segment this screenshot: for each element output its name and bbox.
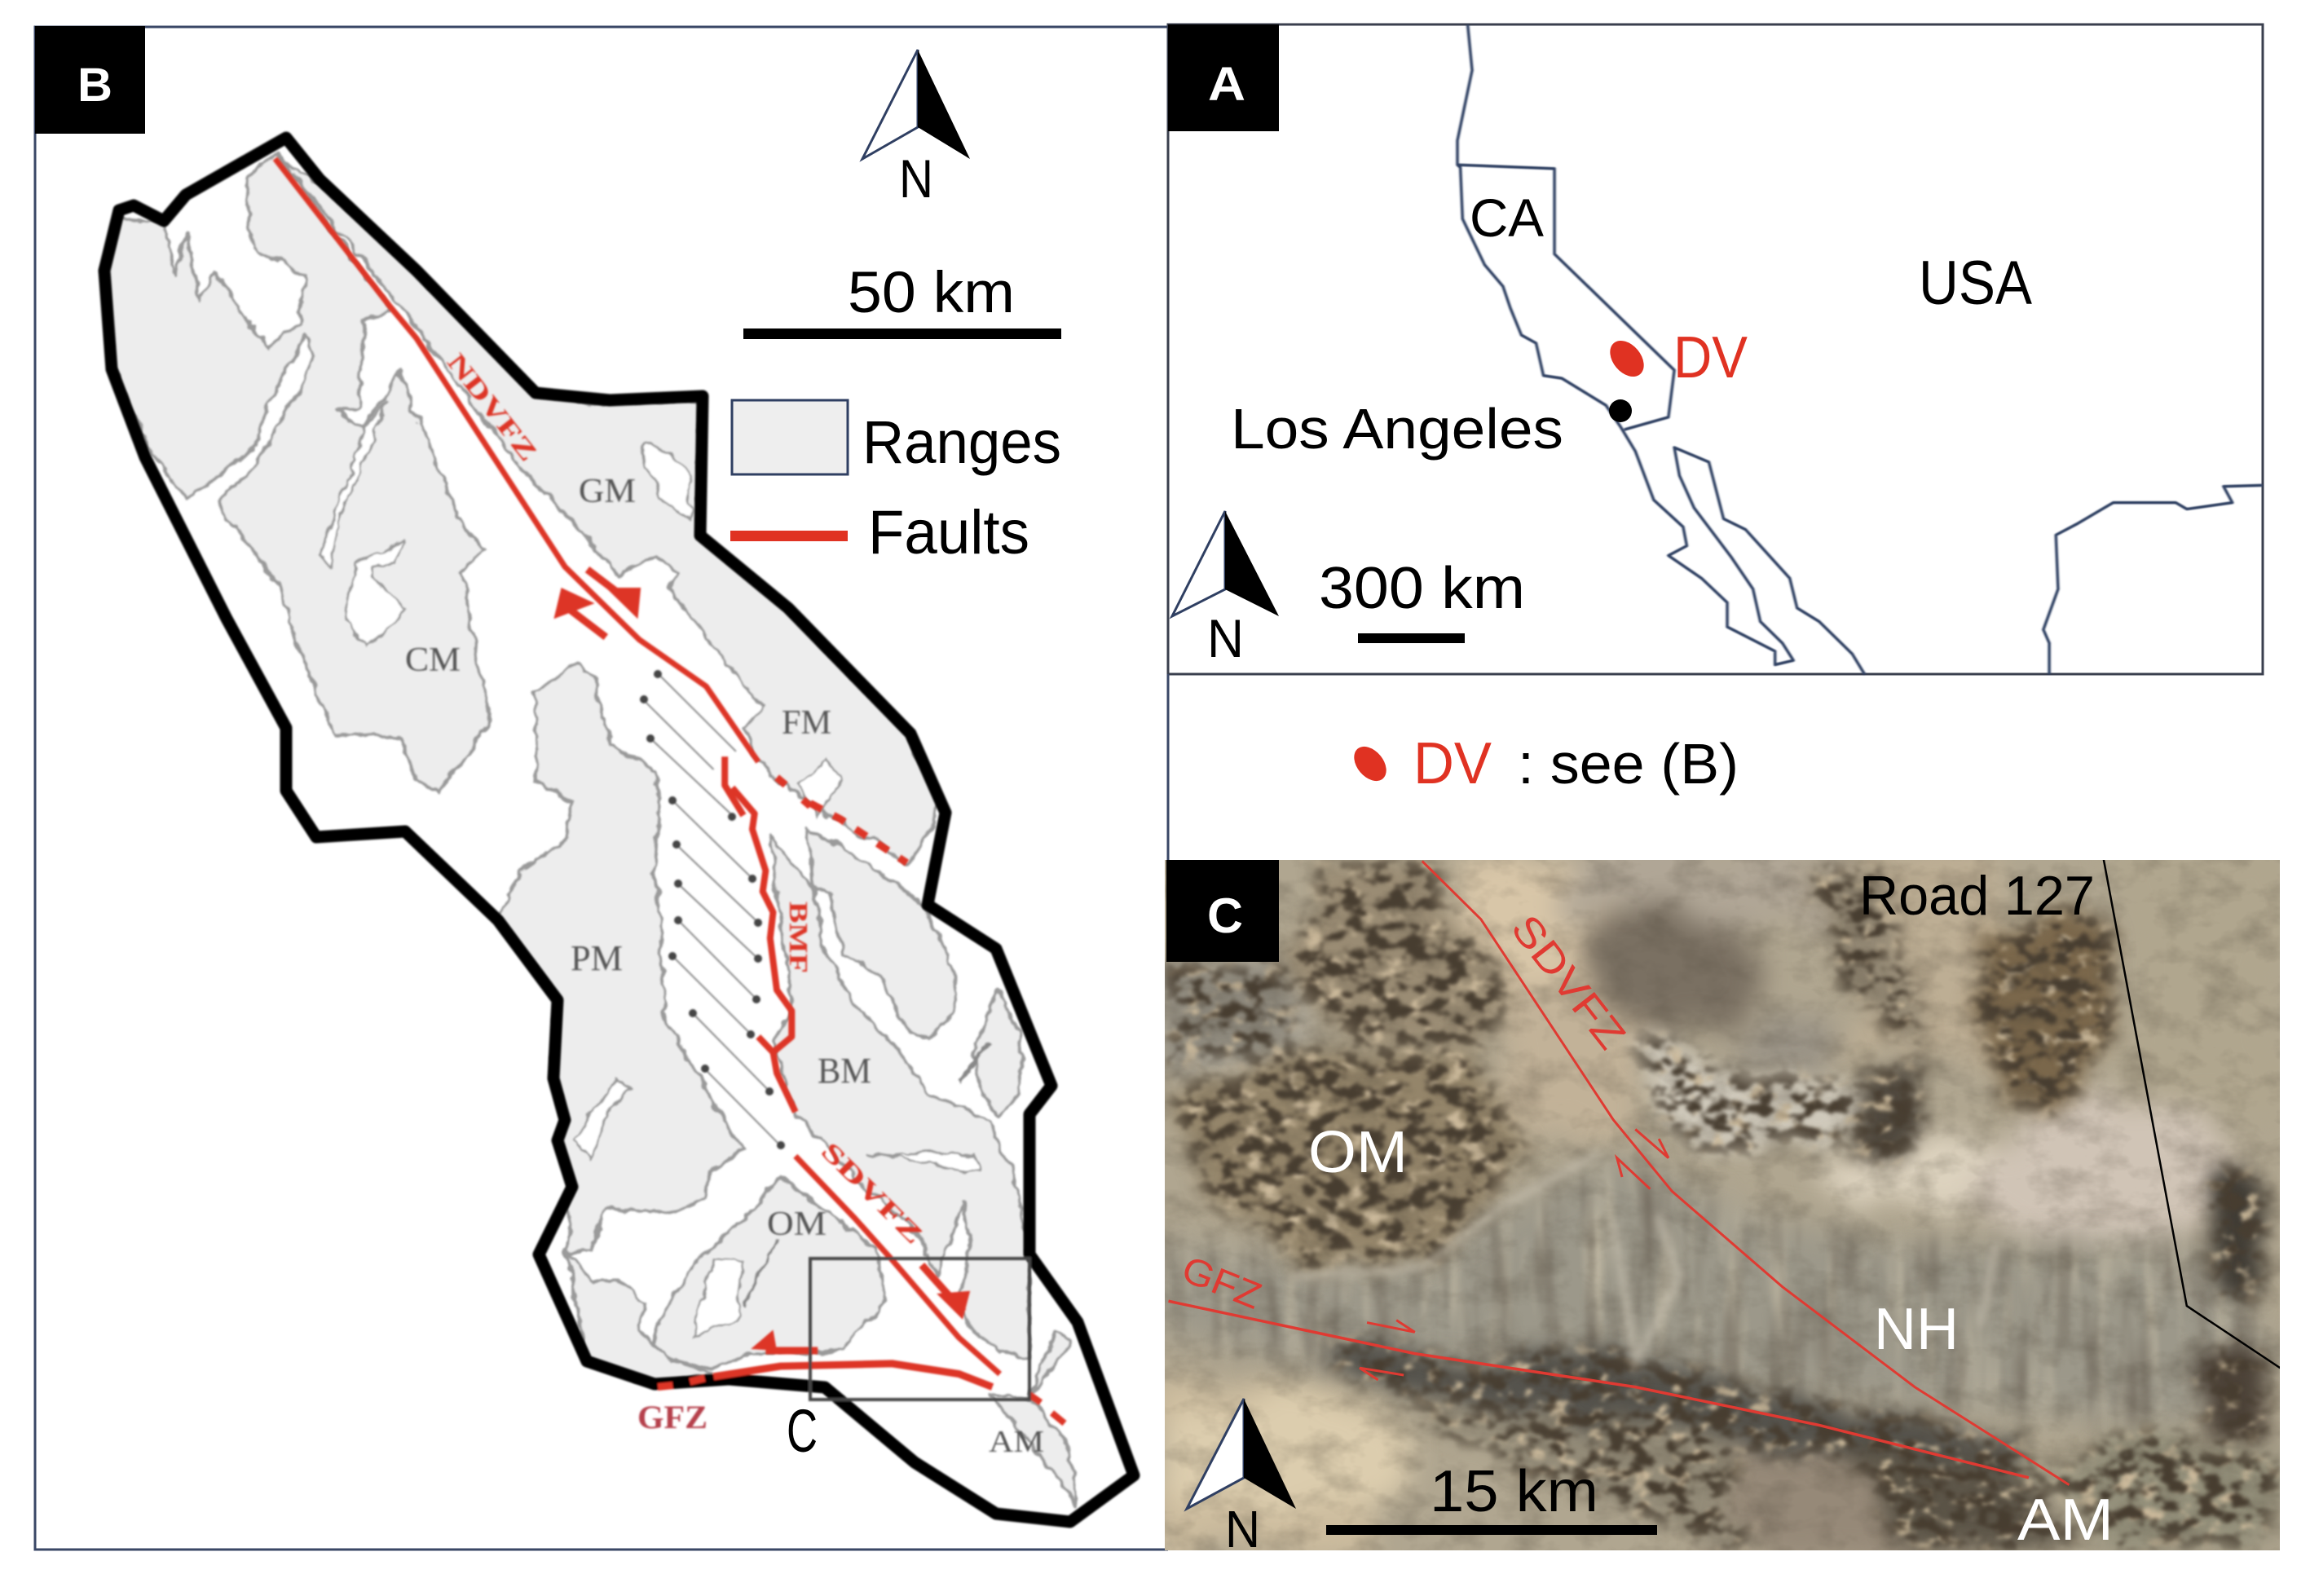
label SDVFZ: SDVFZ [1502, 906, 1634, 1058]
badge C: C [1207, 888, 1243, 943]
scale bar 300 km [1319, 556, 1525, 643]
satellite grain overlay [1165, 860, 2280, 1550]
inset box C [810, 1259, 1029, 1400]
range and fault labels: PM [571, 938, 623, 978]
panel A: location map [1168, 24, 2263, 674]
marker: DV [1603, 325, 1748, 390]
range and fault labels: FM [782, 704, 831, 742]
marker: Los Angeles: Los Angeles [1231, 397, 1563, 461]
badge A: A [1208, 58, 1245, 111]
coastline and borders [1457, 24, 2263, 674]
label C for inset: C [787, 1397, 818, 1465]
north arrow A [1172, 511, 1279, 668]
label USA: USA [1919, 249, 2032, 318]
satellite broad terrain [1157, 848, 2297, 1554]
label OM: OM [1308, 1120, 1408, 1185]
range and fault labels: SDVFZ [816, 1136, 929, 1250]
legend: ranges and faults [730, 400, 1061, 567]
label AM: AM [2017, 1488, 2114, 1553]
map linework and labels [104, 138, 1134, 1522]
range and fault labels: BM [818, 1051, 871, 1091]
range and fault labels [405, 347, 1044, 1459]
range and fault labels: GM [579, 473, 636, 510]
scale bar 50 km: 50 km [848, 261, 1015, 325]
basin hatch dots [640, 670, 785, 1149]
panel B: Death Valley regional map [35, 26, 1168, 1550]
badge C [1166, 858, 1279, 962]
scale bar 15 km [1326, 1459, 1657, 1535]
range and fault labels: CM [405, 641, 461, 679]
legend: ranges and faults: Faults [868, 498, 1029, 567]
range and fault labels: AM [989, 1425, 1044, 1459]
road 127 line [2104, 860, 2280, 1368]
legend: ranges and faults: Ranges [862, 408, 1061, 476]
label NH: NH [1874, 1297, 1959, 1362]
divider line between panels [1167, 674, 1169, 864]
scale bar 300 km: 300 km [1319, 556, 1525, 621]
scale bar 50 km [743, 261, 1061, 339]
valley bays in GM and FM [643, 442, 840, 815]
panel A frame [1168, 24, 2263, 674]
badge B: B [77, 59, 112, 112]
north arrow C [1187, 1399, 1296, 1559]
satellite base colour [1165, 860, 2280, 1550]
alluvial wash lines [1289, 1153, 1995, 1363]
north arrow C: N [1225, 1500, 1260, 1559]
satellite rocky outcrops [1165, 862, 2275, 1550]
key: DV see B: : see (B) [1518, 732, 1739, 796]
scale bar 15 km: 15 km [1430, 1459, 1598, 1524]
faults SDVFZ and GFZ with slip arrows [1169, 861, 2069, 1485]
fault: NDVFZ [275, 159, 810, 815]
southern ranges BM, OM, AM [565, 829, 1078, 1506]
label CA: CA [1470, 187, 1544, 248]
marker: DV: DV [1673, 325, 1748, 390]
range and fault labels: GFZ [637, 1399, 708, 1435]
mountain ranges [104, 153, 1078, 1506]
label GFZ: GFZ [1176, 1247, 1267, 1317]
label Road 127: Road 127 [1859, 865, 2095, 927]
range and fault labels: BMF [784, 902, 813, 973]
key: DV see B [1347, 731, 1739, 796]
study area outline [104, 138, 1134, 1522]
range and fault labels: OM [767, 1206, 827, 1243]
badge A [1168, 24, 1279, 131]
north arrow B: N [899, 148, 933, 209]
range and fault labels: NDVFZ [442, 347, 544, 466]
basin hatch lines [643, 673, 781, 1146]
panel C: satellite image [1157, 848, 2297, 1559]
range: western ranges and CM [104, 153, 491, 793]
range: PM [498, 663, 743, 1252]
faults: BMF, dashed branch, SDVFZ, GFZ [658, 787, 1065, 1423]
north arrow A: N [1207, 608, 1244, 668]
key: DV see B: DV [1413, 731, 1492, 796]
badge B [35, 26, 145, 134]
alluvial fans with streaks [1157, 1153, 2282, 1425]
north arrow B [862, 50, 970, 209]
range: GM and FM [283, 161, 941, 864]
panel B frame [35, 27, 1168, 1550]
